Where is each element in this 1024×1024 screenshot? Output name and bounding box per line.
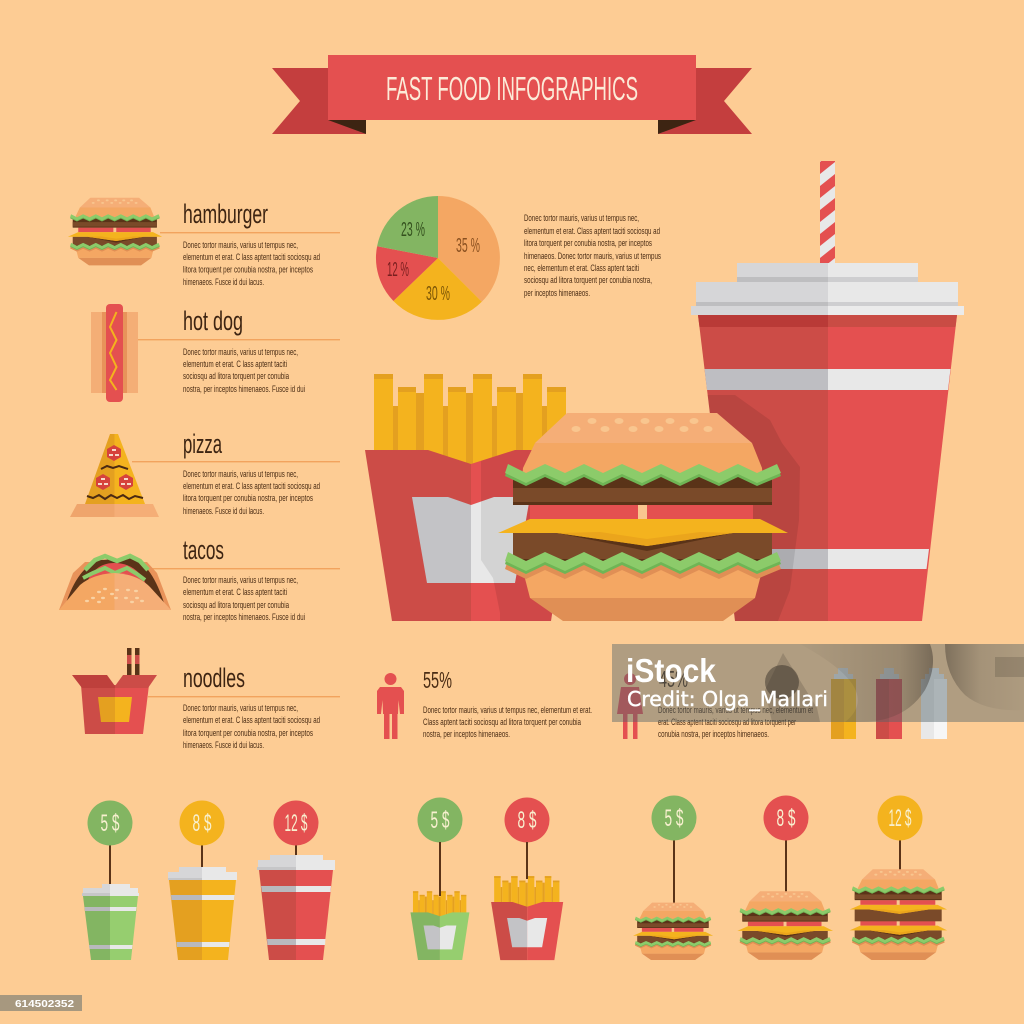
small drink 5$: 5 $ (100, 810, 120, 837)
text: man: nostra, per inceptos himenaeos. (423, 729, 510, 740)
item: hot dog (91, 304, 340, 402)
text: man: Donec tortor mauris, varius ut tempus nec, elementum et erat. (423, 705, 592, 716)
banner right tail (658, 68, 752, 134)
large drink 12$ (257, 800, 335, 960)
divider hamburger (160, 232, 340, 233)
icon: hot dog (91, 304, 138, 402)
title banner (272, 55, 752, 134)
text: hot dog: nostra, per inceptos himenaeos. Fusce id dui (183, 384, 305, 395)
text: hamburger (183, 240, 320, 288)
small burger 5$: 5 $ (664, 805, 684, 832)
watermark logo: iStock (626, 652, 717, 689)
item: noodles (72, 648, 340, 751)
pie description text: sociosqu ad litora torquent per conubia nostra, (524, 275, 652, 286)
item: pizza (70, 429, 340, 517)
slice 12% (376, 246, 438, 301)
label 23%: 23 % (401, 219, 425, 241)
title: FAST FOOD INFOGRAPHICS (386, 70, 638, 107)
large drink 12$: 12 $ (284, 810, 308, 837)
fries box (365, 450, 552, 621)
item: hamburger (68, 198, 340, 288)
medium fries 8$ (491, 798, 563, 960)
pie description text: Donec tortor mauris, varius ut tempus nec, (524, 213, 639, 224)
icon: tacos (59, 556, 171, 610)
heading: hamburger: hamburger (183, 199, 268, 229)
bottle: mayonnaise (921, 668, 947, 739)
slice 35% (438, 196, 500, 302)
watermark credit: Credit: Olga_Mallari (627, 687, 828, 711)
text: noodles: litora torquent per conubia nostra, per inceptos (183, 728, 313, 739)
hero illustration: meal (365, 150, 964, 630)
heading: hot dog: hot dog (183, 306, 243, 336)
icon: noodles box (72, 648, 157, 734)
label 30%: 30 % (426, 283, 450, 305)
text: pizza (183, 469, 320, 517)
text: hamburger: elementum et erat. C lass aptent taciti sociosqu ad (183, 252, 320, 263)
small fries 5$: 5 $ (430, 807, 450, 834)
sauce bottles (831, 668, 947, 739)
text: hot dog: elementum et erat. C lass aptent taciti (183, 359, 287, 370)
heading: pizza: pizza (183, 429, 223, 459)
watermark background (612, 644, 1024, 722)
slice 23% (377, 196, 438, 258)
pie chart: 12 % (387, 259, 409, 281)
small burger 5$ (633, 796, 713, 960)
pie description text: per inceptos himenaeos. (524, 288, 590, 299)
pie description text: himenaeos. Donec tortor mauris, varius ut tempus (524, 251, 661, 262)
big burger (498, 413, 788, 621)
text: tacos: sociosqu ad litora torquent per conubia (183, 600, 289, 611)
item: tacos (59, 535, 340, 623)
straw (820, 161, 835, 263)
text: woman: erat. Class aptent taciti sociosqu ad litora torquent per (658, 717, 796, 728)
text: noodles: himenaeos. Fusce id dui lacus. (183, 740, 264, 751)
icon: man (377, 673, 404, 739)
text: tacos: nostra, per inceptos himenaeos. Fusce id dui (183, 612, 305, 623)
text: woman (658, 705, 813, 740)
french fries (365, 374, 566, 621)
banner right fold (658, 120, 696, 134)
value 45%: 45% (659, 666, 688, 692)
medium drink 8$: 8 $ (192, 810, 212, 837)
pie description text (524, 213, 661, 299)
text: man (423, 705, 592, 740)
text: hot dog: sociosqu ad litora torquent per conubia (183, 371, 289, 382)
drink cup (691, 150, 964, 621)
price group: fries (410, 798, 563, 960)
divider pizza (132, 461, 340, 462)
slice 30% (393, 258, 482, 320)
label 35%: 35 % (456, 235, 480, 257)
text: hamburger: Donec tortor mauris, varius ut tempus nec, (183, 240, 298, 251)
value 55%: 55% (423, 667, 452, 693)
heading: tacos: tacos (183, 535, 224, 565)
text: hamburger: himenaeos. Fusce id dui lacus. (183, 277, 264, 288)
woman statistic (617, 666, 813, 740)
banner left fold (328, 120, 366, 134)
price group: drinks (82, 800, 335, 960)
text: noodles (183, 703, 320, 751)
text: pizza: Donec tortor mauris, varius ut tempus nec, (183, 469, 298, 480)
text: hamburger: litora torquent per conubia nostra, per inceptos (183, 264, 313, 276)
pie chart (376, 196, 500, 320)
pie description text: elementum et erat. Class aptent taciti sociosqu ad (524, 226, 660, 237)
text: woman: Donec tortor mauris, varius ut tempus nec, elementum et (658, 705, 813, 716)
medium fries 8$: 8 $ (518, 807, 536, 834)
cup body (698, 315, 957, 621)
small drink 5$ (82, 800, 139, 960)
man statistic (377, 667, 592, 740)
text: tacos (183, 575, 305, 623)
text: tacos: elementum et erat. C lass aptent taciti (183, 587, 287, 598)
divider hot dog (138, 339, 340, 340)
medium burger 8$ (737, 796, 833, 960)
icon: woman (617, 673, 643, 739)
id number: 614502352 (15, 998, 74, 1010)
divider tacos (148, 568, 340, 569)
large burger 12$ (850, 796, 947, 960)
text: pizza: elementum et erat. C lass aptent taciti sociosqu ad (183, 481, 320, 492)
banner ribbon (328, 55, 696, 120)
bottle: mustard (831, 668, 856, 739)
text: hot dog (183, 347, 305, 395)
text: woman: conubia nostra, per inceptos himenaeos. (658, 729, 769, 740)
medium burger 8$: 8 $ (776, 805, 796, 832)
large burger 12$: 12 $ (888, 805, 912, 832)
icon: pizza (70, 434, 159, 517)
text: hot dog: Donec tortor mauris, varius ut tempus nec, (183, 347, 298, 358)
price group: burgers (633, 796, 947, 960)
medium drink 8$ (168, 800, 237, 960)
text: pizza: himenaeos. Fusce id dui lacus. (183, 506, 264, 517)
fries sticks (374, 374, 566, 466)
pie description text: nec, elementum et erat. Class aptent taciti (524, 263, 639, 274)
watermark shapes (765, 644, 1024, 722)
text: noodles: elementum et erat. C lass aptent taciti sociosqu ad (183, 715, 320, 726)
icon: hamburger (68, 198, 162, 265)
text: noodles: Donec tortor mauris, varius ut tempus nec, (183, 703, 298, 714)
bottle: ketchup (876, 668, 902, 739)
text: pizza: litora torquent per conubia nostra, per inceptos (183, 493, 313, 504)
text: tacos: Donec tortor mauris, varius ut tempus nec, (183, 575, 298, 586)
heading: noodles: noodles (183, 663, 245, 693)
text: man: Class aptent taciti sociosqu ad litora torquent per conubia (423, 717, 581, 728)
lid (691, 263, 964, 315)
id tag background (0, 995, 82, 1011)
pie description text: litora torquent per conubia nostra, per inceptos (524, 238, 652, 249)
watermark band (612, 644, 1024, 722)
image id tag (0, 995, 82, 1011)
banner left tail (272, 68, 366, 134)
small fries 5$ (410, 798, 469, 960)
divider noodles (148, 696, 340, 697)
